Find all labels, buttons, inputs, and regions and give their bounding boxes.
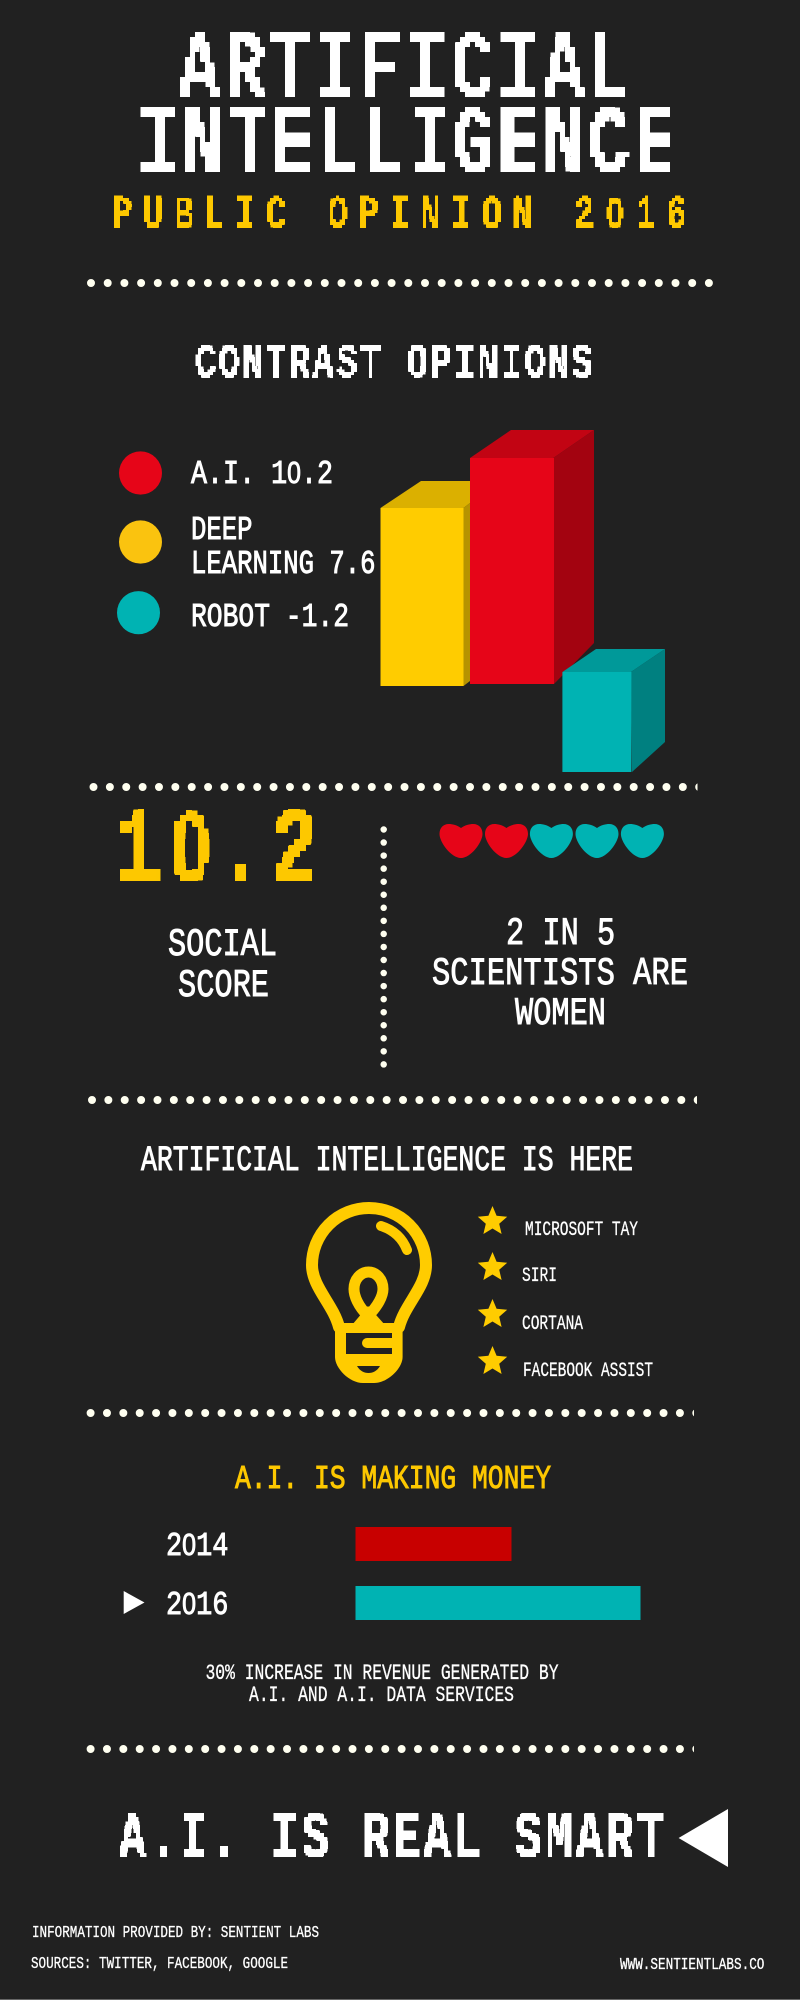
row: 2014: 2014 (166, 1527, 228, 1565)
icon row: hearts (440, 824, 664, 858)
title: ARTIFICIAL (178, 18, 634, 127)
bar chart: revenue (124, 1527, 640, 1624)
list item: Cortana: CORTANA (522, 1313, 583, 1336)
legend item: deep learning: DEEP (191, 512, 252, 549)
legend item: robot: ROBOT -1.2 (191, 599, 349, 636)
footer: credits (31, 1924, 319, 1974)
text: scientists are women: SCIENTISTS ARE (432, 952, 688, 996)
list item: Microsoft Tay (478, 1206, 638, 1242)
text: revenue note (206, 1661, 558, 1708)
footer: credits: SOURCES: TWITTER, FACEBOOK, GOOGLE (31, 1955, 288, 1974)
list item: Facebook Assist (478, 1346, 653, 1383)
text: scientists are women: WOMEN (515, 992, 606, 1036)
label: social score (168, 923, 277, 1008)
legend item: A.I. (119, 451, 333, 495)
title: INTELLIGENCE (137, 93, 678, 202)
legend item: robot (117, 591, 349, 636)
bar: robot (562, 649, 665, 772)
icon: light bulb (312, 1208, 426, 1383)
row: 2016 (124, 1586, 640, 1624)
list item: Siri (478, 1252, 557, 1288)
tagline: A.I. IS REAL SMART (119, 1802, 667, 1877)
heading: AI is here: ARTIFICIAL INTELLIGENCE IS HERE (141, 1141, 633, 1181)
subtitle: PUBLIC OPINION 2016 (112, 190, 697, 243)
legend item: deep learning: LEARNING 7.6 (191, 546, 376, 583)
arrow: left triangle (679, 1809, 728, 1867)
heading: making money: A.I. IS MAKING MONEY (235, 1461, 551, 1498)
big number: social score: 10.2 (115, 791, 323, 915)
text: revenue note: 30% INCREASE IN REVENUE GENERATED BY (206, 1661, 558, 1686)
legend (117, 451, 376, 636)
label: social score: SOCIAL (168, 923, 277, 967)
list: AI assistants (478, 1206, 653, 1383)
footer: credits: INFORMATION PROVIDED BY: SENTIENT LABS (32, 1924, 319, 1943)
3D bar chart (380, 430, 665, 772)
legend item: A.I.: A.I. 10.2 (191, 455, 333, 493)
text: revenue note: A.I. AND A.I. DATA SERVICES (249, 1683, 514, 1708)
list item: Microsoft Tay: MICROSOFT TAY (525, 1219, 638, 1242)
heading: contrast opinions: CONTRAST OPINIONS (195, 337, 595, 392)
label: social score: SCORE (178, 964, 269, 1008)
row: 2016: 2016 (166, 1586, 228, 1624)
list item: Facebook Assist: FACEBOOK ASSIST (523, 1360, 653, 1383)
text: scientists are women: 2 IN 5 (506, 912, 615, 956)
title (137, 18, 678, 202)
bar: deep learning (380, 481, 470, 686)
text: scientists are women (432, 912, 688, 1036)
list item: Cortana (478, 1299, 583, 1336)
legend item: deep learning (119, 512, 376, 583)
bar: A.I. (470, 430, 594, 684)
list item: Siri: SIRI (522, 1265, 557, 1288)
row: 2014 (166, 1527, 512, 1565)
